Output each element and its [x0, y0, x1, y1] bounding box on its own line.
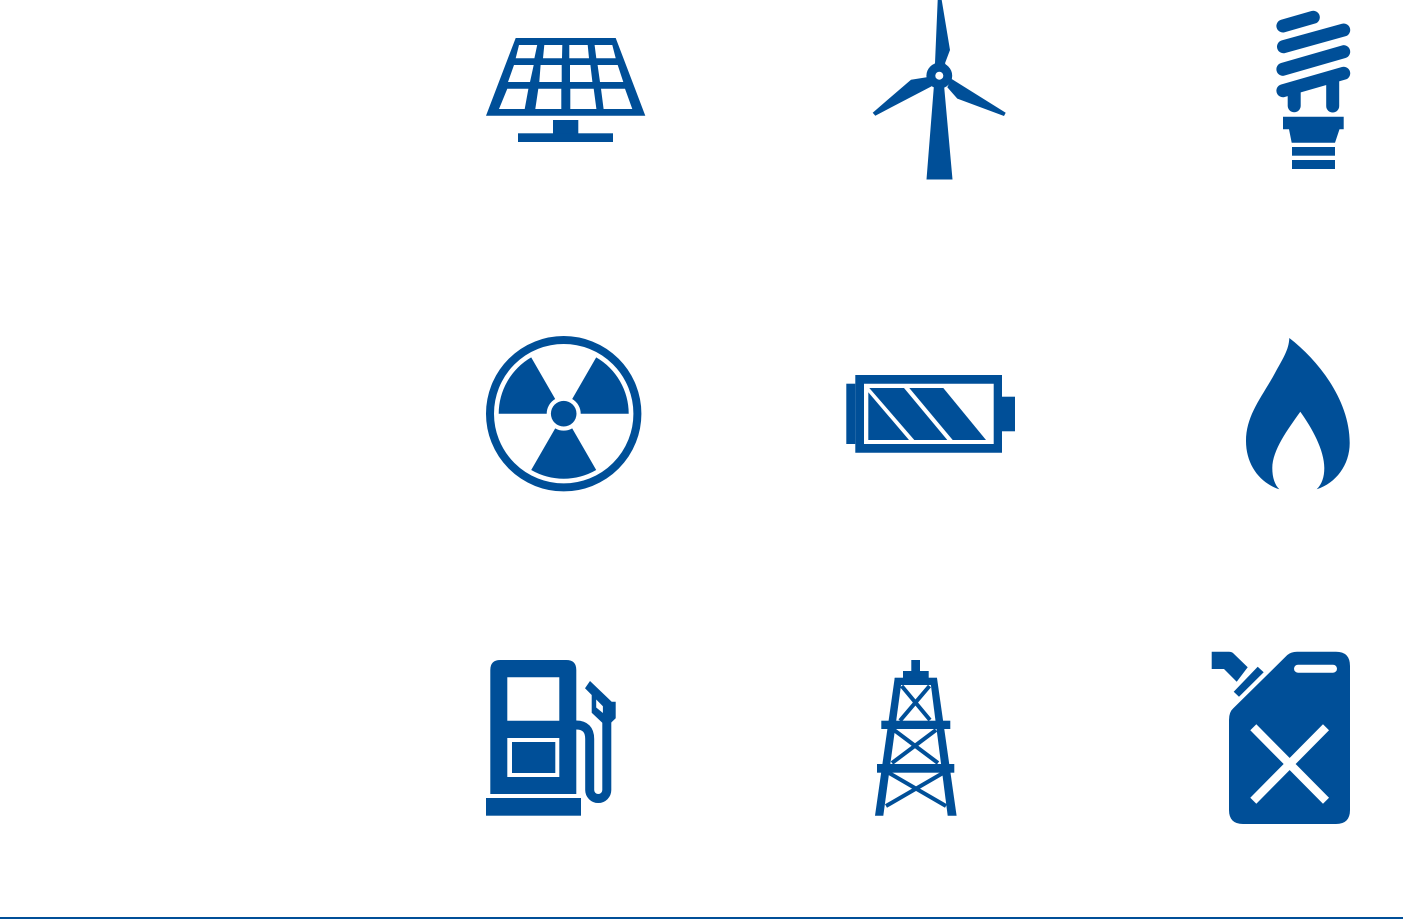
- bottom rule: [0, 917, 1403, 919]
- icon: energy-saving light bulb: [1283, 17, 1344, 169]
- icon: jerry can: [1212, 652, 1350, 824]
- icon: gas flame: [1246, 338, 1350, 489]
- icon: wind turbine: [873, 0, 1006, 180]
- icon: solar panel: [486, 38, 645, 142]
- icon: radiation symbol: [490, 340, 637, 487]
- icon: battery: [846, 375, 1015, 453]
- icon: fuel pump: [486, 660, 616, 816]
- icon: oil derrick: [875, 660, 957, 816]
